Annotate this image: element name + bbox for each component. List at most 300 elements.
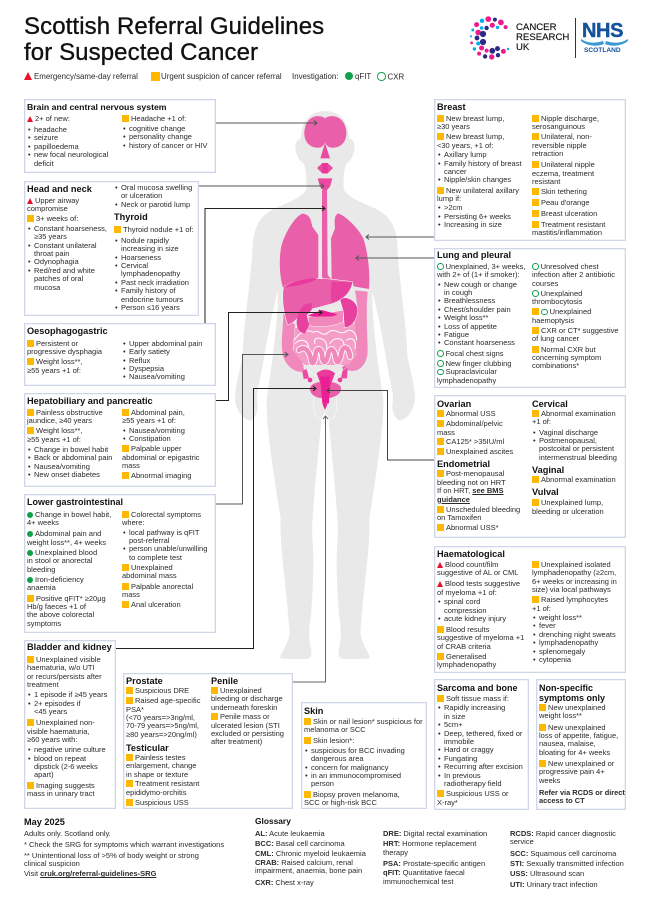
breast left column: >2cm [444, 203, 463, 212]
lower GI right column: mass [122, 590, 140, 599]
lung right column: Unexplained [541, 289, 582, 298]
prostate and testicular column: PSA* [126, 705, 144, 714]
glossary column 3: USS: Ultrasound scan [510, 869, 584, 878]
panel: sarcoma and bone [434, 679, 529, 810]
bladder and kidney column: 1 episode if ≥45 years [34, 690, 107, 699]
bladder and kidney column: dipstick (2-6 weeks [34, 762, 98, 771]
hepatobiliary left column: Nausea/vomiting [34, 462, 90, 471]
penile column [211, 676, 284, 746]
lower GI right column: to complete test [129, 553, 182, 562]
logo divider [574, 18, 576, 58]
footnote: weight loss: clinical suspicion [24, 859, 80, 868]
thyroid column: Past neck irradiation [121, 278, 189, 287]
non-specific column: bloating for 4+ weeks [539, 748, 610, 757]
prostate and testicular column: in shape or texture [126, 770, 188, 779]
panel: lower gastrointestinal [24, 494, 216, 633]
lower GI right column: abdominal mass [122, 571, 177, 580]
skin column: dangerous area [311, 754, 364, 763]
legend: urgent referral: Urgent suspicion of cancer referral [161, 72, 282, 81]
panel: oesophagogastric [24, 323, 216, 386]
ovarian and endometrial column: Unexplained ascites [446, 447, 513, 456]
brain left column: seizure [34, 133, 58, 142]
head and neck column: mucosa [34, 283, 60, 292]
connector: breast [366, 234, 434, 240]
non-specific column: weeks [539, 776, 560, 785]
glossary column 1: BCC: Basal cell carcinoma [255, 839, 345, 848]
penile column: bleeding or discharge [211, 694, 283, 703]
prostate and testicular column: Suspicious DRE [135, 686, 189, 695]
legend: emergency referral: Emergency/same-day referral [34, 72, 138, 81]
haematological right column: drenching night sweats [539, 630, 616, 639]
ovarian and endometrial column: If on HRT, see BMS [437, 486, 504, 495]
breast left column: <30 years, +1 of: [437, 141, 493, 150]
lung left column: Focal chest signs [446, 349, 504, 358]
non-specific column: New unexplained [548, 722, 606, 732]
haematological right column: +1 of: [532, 604, 551, 613]
brain left column: headache [34, 125, 67, 134]
ovarian and endometrial column: mass [437, 428, 455, 437]
haematological left column: Generalised [446, 652, 486, 661]
cervical, vaginal and vulval column: Vaginal [532, 465, 564, 475]
lung left column: New finger clubbing [446, 359, 511, 368]
lung left column: Constant hoarseness [444, 338, 515, 347]
ovarian and endometrial column: on Tamoxifen [437, 513, 481, 522]
title: Scottish Referral Guidelines [24, 13, 324, 40]
lower GI right column [122, 510, 207, 609]
ovarian and endometrial column: guidance [437, 495, 470, 504]
haematological right column: size) via local pathways [532, 585, 611, 594]
breast left column: New breast lump, [446, 114, 504, 123]
haematological left column: Blood count/film [445, 560, 498, 569]
lower GI left column: Change in bowel habit, [35, 510, 111, 519]
hepatobiliary right column: Abnormal imaging [131, 471, 191, 480]
haematological right column: weight loss** [539, 613, 582, 622]
skin column: melanoma or SCC [304, 725, 366, 734]
sarcoma column: radiotherapy field [444, 779, 502, 788]
lung right column [532, 262, 619, 370]
breast left column: New unilateral axillary [446, 186, 519, 195]
breast left column: Persisting 6+ weeks [444, 212, 511, 221]
glossary column 2: therapy [383, 848, 408, 857]
thyroid column: increasing in size [121, 244, 179, 253]
glossary column 3 [510, 830, 624, 889]
breast left column: lump if: [437, 194, 461, 203]
heading: breast: Breast [437, 102, 466, 112]
oesophagogastric left column [27, 339, 102, 375]
bladder and kidney column: ≥60 years with: [27, 735, 77, 744]
connector: bladder and kidney [115, 386, 316, 648]
haematological left column: suggestive of myeloma +1 [437, 633, 524, 642]
lower GI left column: Hb/g faeces +1 of [27, 602, 86, 611]
haematological right column: Raised lymphocytes [541, 595, 608, 604]
haematological left column: lymphadenopathy [437, 660, 496, 669]
glossary column 1 [255, 829, 366, 887]
breast right column: Nipple discharge, [541, 114, 599, 123]
glossary column 2: qFIT: Quantitative faecal [383, 868, 465, 877]
sarcoma column: in size [444, 712, 465, 721]
bladder and kidney column: haematuria, w/o UTI [27, 663, 95, 672]
website link: Visit cruk.org/referral-guidelines-SRG [24, 869, 156, 878]
lung left column: Breathlessness [444, 296, 495, 305]
legend: CXR: CXR [388, 72, 404, 82]
haematological left column: Blood tests suggestive [445, 579, 520, 588]
skin column: suspicious for BCC invading [311, 746, 405, 755]
sarcoma column: Fungating [444, 754, 477, 763]
penile column: ulcerated lesion (STI [211, 721, 280, 730]
lung right column: courses [532, 279, 558, 288]
head and neck column: Red/red and white [34, 266, 95, 275]
hepatobiliary right column: Abdominal pain, [131, 408, 185, 417]
glossary heading: Glossary [255, 816, 291, 826]
organ: small intestine [293, 315, 357, 365]
ovarian and endometrial column: Abnormal USS* [446, 523, 499, 532]
lower GI left column: Positive qFIT* ≥20μg [36, 594, 106, 603]
organ: oesophagus [322, 190, 332, 282]
thyroid column: Cervical [121, 261, 148, 270]
footnote: weight loss: ** Unintentional loss of >5% of body weight or strong [24, 851, 199, 860]
cervical, vaginal and vulval column [532, 399, 617, 516]
oesophagogastric left column: ≥55 years +1 of: [27, 366, 81, 375]
panel: head and neck, thyroid [24, 181, 198, 316]
cervical, vaginal and vulval column: postcoital or persistent [539, 444, 614, 453]
sarcoma column: immobile [444, 737, 474, 746]
lung right column: of lung cancer [532, 334, 579, 343]
ovarian and endometrial column: Abnormal USS [446, 409, 496, 418]
oesophagogastric right column: Early satiety [129, 347, 170, 356]
breast left column: Nipple/skin changes [444, 175, 511, 184]
brain left column: papilloedema [34, 142, 79, 151]
glossary column 2 [383, 830, 487, 886]
head and neck column: 3+ weeks of: [36, 214, 78, 223]
bladder and kidney column: apart) [34, 770, 54, 779]
bladder and kidney column: visible haematuria, [27, 727, 90, 736]
prostate and testicular column: Testicular [126, 743, 169, 753]
hepatobiliary left column: Weight loss**, [36, 426, 83, 435]
lung left column: Chest/shoulder pain [444, 305, 511, 314]
lower GI left column: symptoms [27, 619, 61, 628]
logo wordmark: RESEARCH [516, 32, 569, 43]
skin column: concern for malignancy [311, 763, 389, 772]
logo wordmark: UK [516, 42, 529, 53]
lung right column: Unresolved chest [541, 262, 599, 271]
lower GI left column [27, 510, 111, 628]
ovarian and endometrial column: Endometrial [437, 459, 490, 469]
heading: oesophagogastric: Oesophagogastric [27, 326, 108, 336]
hepatobiliary right column: mass [122, 461, 140, 470]
connector: prostate and penile [293, 416, 328, 682]
brain right column: cognitive change [129, 124, 185, 133]
prostate and testicular column: epididymo-orchitis [126, 788, 186, 797]
cervical, vaginal and vulval column: Postmenopausal, [539, 436, 597, 445]
breast right column: eczema, treatment [532, 169, 594, 178]
heading: haematological: Haematological [437, 549, 505, 559]
logo: Cancer Research UK [470, 16, 569, 60]
legend: CXR [377, 72, 404, 82]
lower GI right column: person unable/unwilling [129, 544, 207, 553]
hepatobiliary left column: Change in bowel habit [34, 445, 108, 454]
NHS lettering: NHS [582, 20, 623, 42]
hepatobiliary right column: Constipation [129, 434, 171, 443]
non-specific column: weight loss** [539, 711, 582, 720]
bladder and kidney column [27, 642, 112, 798]
haematological left column [437, 560, 524, 669]
thyroid column: or ulceration [121, 191, 162, 200]
breast right column: Peau d'orange [541, 198, 590, 207]
sarcoma column: Suspicious USS or [446, 789, 509, 798]
head and neck column: Constant hoarseness, [34, 224, 107, 233]
organ: lungs [280, 213, 369, 289]
connector: head and neck [198, 184, 324, 188]
thyroid column: Neck or parotid lump [121, 200, 190, 209]
bladder and kidney column: blood on repeat [34, 754, 86, 763]
ovarian and endometrial column: bleeding not on HRT [437, 478, 506, 487]
cervical, vaginal and vulval column: intermenstrual bleeding [539, 453, 617, 462]
hepatobiliary left column: jaundice, ≥40 years [27, 416, 92, 425]
prostate and testicular column: enlargement, change [126, 761, 196, 770]
thyroid column: Hoarseness [121, 253, 161, 262]
legend [24, 72, 404, 82]
haematological left column: of CRAB criteria [437, 642, 491, 651]
head and neck column: compromise [27, 204, 68, 213]
breast right column: Breast ulceration [541, 209, 597, 218]
lower GI left column: Iron-deficiency [35, 575, 84, 584]
glossary column 1: CXR: Chest x-ray [255, 878, 314, 887]
skin column: Skin or nail lesion* suspicious for [313, 717, 423, 726]
date: May 2025 [24, 817, 65, 827]
bladder and kidney column: negative urine culture [34, 745, 106, 754]
heading: lung and pleural: Lung and pleural [437, 250, 511, 260]
logo: NHS Scotland [581, 20, 628, 54]
ovarian and endometrial column: Unscheduled bleeding [446, 505, 520, 514]
thyroid column: Oral mucosa swelling [121, 183, 192, 192]
sarcoma column: X-ray* [437, 798, 458, 807]
head and neck column: ≥35 years [34, 232, 67, 241]
cervical, vaginal and vulval column: Vaginal discharge [539, 428, 598, 437]
haematological right column: cytopenia [539, 655, 571, 664]
bladder and kidney column: Bladder and kidney [27, 642, 112, 652]
panel: brain and central nervous system [24, 99, 216, 173]
head and neck column: Odynophagia [34, 257, 79, 266]
connector: lower gastrointestinal [215, 352, 288, 504]
brain right column: Headache +1 of: [131, 114, 186, 123]
ovarian and endometrial column: Abdominal/pelvic [446, 419, 503, 428]
haematological left column: Blood results [446, 625, 489, 634]
heading: hepatobiliary: Hepatobiliary and pancreatic [27, 396, 153, 406]
thyroid column: Nodule rapidly [121, 236, 169, 245]
panel: hepatobiliary and pancreatic [24, 393, 216, 487]
lower GI left column: Abdominal pain and [35, 529, 101, 538]
glossary column 3: RCDS: Rapid cancer diagnostic [510, 829, 616, 838]
bladder and kidney column: Unexplained visible [36, 655, 101, 664]
brain right column: personality change [129, 132, 192, 141]
breast right column: mastitis/inflammation [532, 228, 602, 237]
lung left column: with 2+ of (1+ if smoker): [437, 270, 520, 279]
prostate and testicular column: Prostate [126, 676, 163, 686]
lung left column: Unexplained, 3+ weeks, [446, 262, 525, 271]
non-specific column [539, 683, 625, 805]
prostate and testicular column: ≥80 years=>20ng/ml) [126, 730, 197, 739]
bladder and kidney column: Imaging suggests [36, 781, 95, 790]
sarcoma column: Deep, tethered, fixed or [444, 729, 522, 738]
breast left column: Family history of breast [444, 159, 522, 168]
penile column: Unexplained [220, 686, 262, 695]
glossary [255, 816, 624, 889]
hepatobiliary right column: abdominal or epigastric [122, 453, 200, 462]
head and neck column: Head and neck [27, 184, 92, 194]
breast right column: reversible nipple [532, 141, 587, 150]
haematological right column: splenomegaly [539, 647, 585, 656]
prostate and testicular column [126, 676, 200, 807]
lower GI right column: Colorectal symptoms [131, 510, 201, 519]
lung right column: concerning symptom [532, 353, 601, 362]
lung right column: Unexplained [550, 307, 591, 316]
haematological right column [532, 560, 617, 664]
breast right column: serosanguinous [532, 122, 585, 131]
organ: throat and thyroid [317, 143, 333, 192]
lower GI right column: where: [122, 518, 145, 527]
lung right column: haemoptysis [532, 316, 574, 325]
sarcoma column: Hard or craggy [444, 745, 494, 754]
non-specific column: progressive pain 4+ [539, 767, 605, 776]
lower GI right column: Unexplained [131, 563, 173, 572]
sarcoma column: Recurring after excision [444, 762, 523, 771]
skin column: SCC or high-risk BCC [304, 798, 377, 807]
haematological left column: compression [444, 606, 487, 615]
SCOTLAND lettering: SCOTLAND [584, 47, 621, 54]
glossary column 3: UTI: Urinary tract infection [510, 880, 598, 889]
lung right column: Normal CXR but [541, 345, 596, 354]
connector: oesophagogastric [205, 206, 325, 323]
breast right column [532, 114, 606, 237]
ovarian and endometrial column: Post-menopausal [446, 469, 504, 478]
brain left column: new focal neurological [34, 150, 108, 159]
lung right column: thrombocytosis [532, 297, 582, 306]
prostate and testicular column: 70-79 years=>5ng/ml, [126, 721, 199, 730]
hepatobiliary right column [122, 408, 200, 480]
brain left column: deficit [34, 159, 54, 168]
breast right column: Unilateral nipple [541, 160, 595, 169]
hepatobiliary right column: Palpable upper [131, 444, 181, 453]
skin column: in an immunocompromised [311, 771, 401, 780]
skin column: Skin [304, 706, 323, 716]
logo mark: dotted C [470, 16, 510, 60]
scope note: Adults only. Scotland only. [24, 829, 111, 838]
brain right column: history of cancer or HIV [129, 141, 207, 150]
penile column: excluded or persisting [211, 729, 284, 738]
thyroid column: lymphadenopathy [121, 269, 180, 278]
panel: breast [434, 99, 626, 241]
penile column: after treatment) [211, 737, 262, 746]
oesophagogastric left column: progressive dysphagia [27, 347, 102, 356]
non-specific column: loss of appetite, fatigue, [539, 731, 618, 740]
bladder and kidney column: treatment [27, 680, 59, 689]
lung left column: New cough or change [444, 280, 517, 289]
hepatobiliary left column [26, 408, 112, 479]
title: for Suspected Cancer [24, 39, 258, 66]
cervical, vaginal and vulval column: Abnormal examination [541, 475, 616, 484]
glossary column 3: STI: Sexually transmitted infection [510, 859, 624, 868]
non-specific column: Non-specific [539, 683, 593, 693]
prostate and testicular column: Treatment resistant [135, 779, 199, 788]
glossary column 2: immunochemical test [383, 877, 453, 886]
organ: brain [304, 116, 346, 148]
logo wordmark: CANCER [516, 22, 557, 33]
breast right column: retraction [532, 149, 563, 158]
haematological left column: of myeloma +1 of: [437, 588, 497, 597]
glossary column 1: impairment, anaemia, bone pain [255, 866, 362, 875]
cervical, vaginal and vulval column: Vulval [532, 487, 559, 497]
breast left column: New breast lump, [446, 132, 504, 141]
footnote: weight loss [24, 851, 199, 868]
brain left column [27, 114, 108, 168]
glossary column 2: DRE: Digital rectal examination [383, 829, 487, 838]
non-specific column: Refer via RCDS or direct [539, 788, 625, 797]
lung left column [437, 262, 525, 385]
lower GI left column: weight loss**, 4+ weeks [27, 538, 106, 547]
panel: skin [301, 702, 427, 809]
glossary column 1: CML: Chronic myeloid leukaemia [255, 849, 366, 858]
sarcoma column: 5cm+ [444, 720, 463, 729]
skin column: Biopsy proven melanoma, [313, 790, 400, 799]
oesophagogastric left column: Weight loss**, [36, 357, 83, 366]
thyroid column [114, 183, 194, 312]
prostate and testicular column: Raised age-specific [135, 696, 200, 705]
non-specific column: nausea, malaise, [539, 739, 596, 748]
skin column [304, 706, 423, 807]
cervical, vaginal and vulval column: Unexplained lump, [541, 498, 603, 507]
legend: investigation label: Investigation: [292, 72, 338, 81]
connector: gynaecological [327, 388, 434, 460]
thyroid column: Family history of [121, 286, 176, 295]
oesophagogastric left column: Persistent or [36, 339, 78, 348]
haematological left column: suggestive of AL or CML [437, 568, 518, 577]
haematological right column: lymphadenopathy [539, 638, 598, 647]
hepatobiliary left column: New onset diabetes [34, 470, 100, 479]
brain left column: 2+ of new: [35, 114, 70, 123]
thyroid column: Person ≤16 years [121, 303, 180, 312]
sarcoma column: Sarcoma and bone [437, 683, 518, 693]
ovarian and endometrial column [437, 399, 520, 532]
cervical, vaginal and vulval column: Abnormal examination [541, 409, 616, 418]
prostate and testicular column: Painless testes [135, 753, 185, 762]
lung right column: CXR or CT* suggestive [541, 326, 619, 335]
panel: haematological [434, 546, 626, 673]
legend: qFIT [345, 72, 371, 81]
organ: reproductive system [302, 367, 348, 410]
lung right column: combinations* [532, 361, 579, 370]
organ: large intestine [282, 290, 368, 372]
sarcoma column: Rapidly increasing [444, 703, 505, 712]
non-specific column: New unexplained or [548, 759, 614, 768]
lung left column: lymphadenopathy [437, 376, 496, 385]
lower GI right column: post-referral [129, 536, 169, 545]
skin column: Skin lesion*: [313, 736, 354, 744]
lung left column: Loss of appetite [444, 322, 497, 331]
connector: brain [215, 120, 317, 126]
head and neck column: patches of oral [34, 274, 83, 283]
oesophagogastric right column: Upper abdominal pain [129, 339, 202, 348]
legend: qFIT: qFIT [355, 72, 371, 81]
heading: lower gastrointestinal: Lower gastrointestinal [27, 497, 123, 507]
lung left column: Fatigue [444, 330, 469, 339]
lower GI left column: anaemia [27, 583, 56, 592]
heading: brain: Brain and central nervous system [27, 102, 167, 112]
bladder and kidney column: Unexplained non- [36, 718, 95, 727]
breast left column: ≥30 years [437, 122, 470, 131]
oesophagogastric right column: Nausea/vomiting [129, 372, 185, 381]
lung left column: Supraclavicular [446, 367, 497, 376]
footnote: SRG: * Check the SRG for symptoms which warrant investigations [24, 840, 224, 849]
